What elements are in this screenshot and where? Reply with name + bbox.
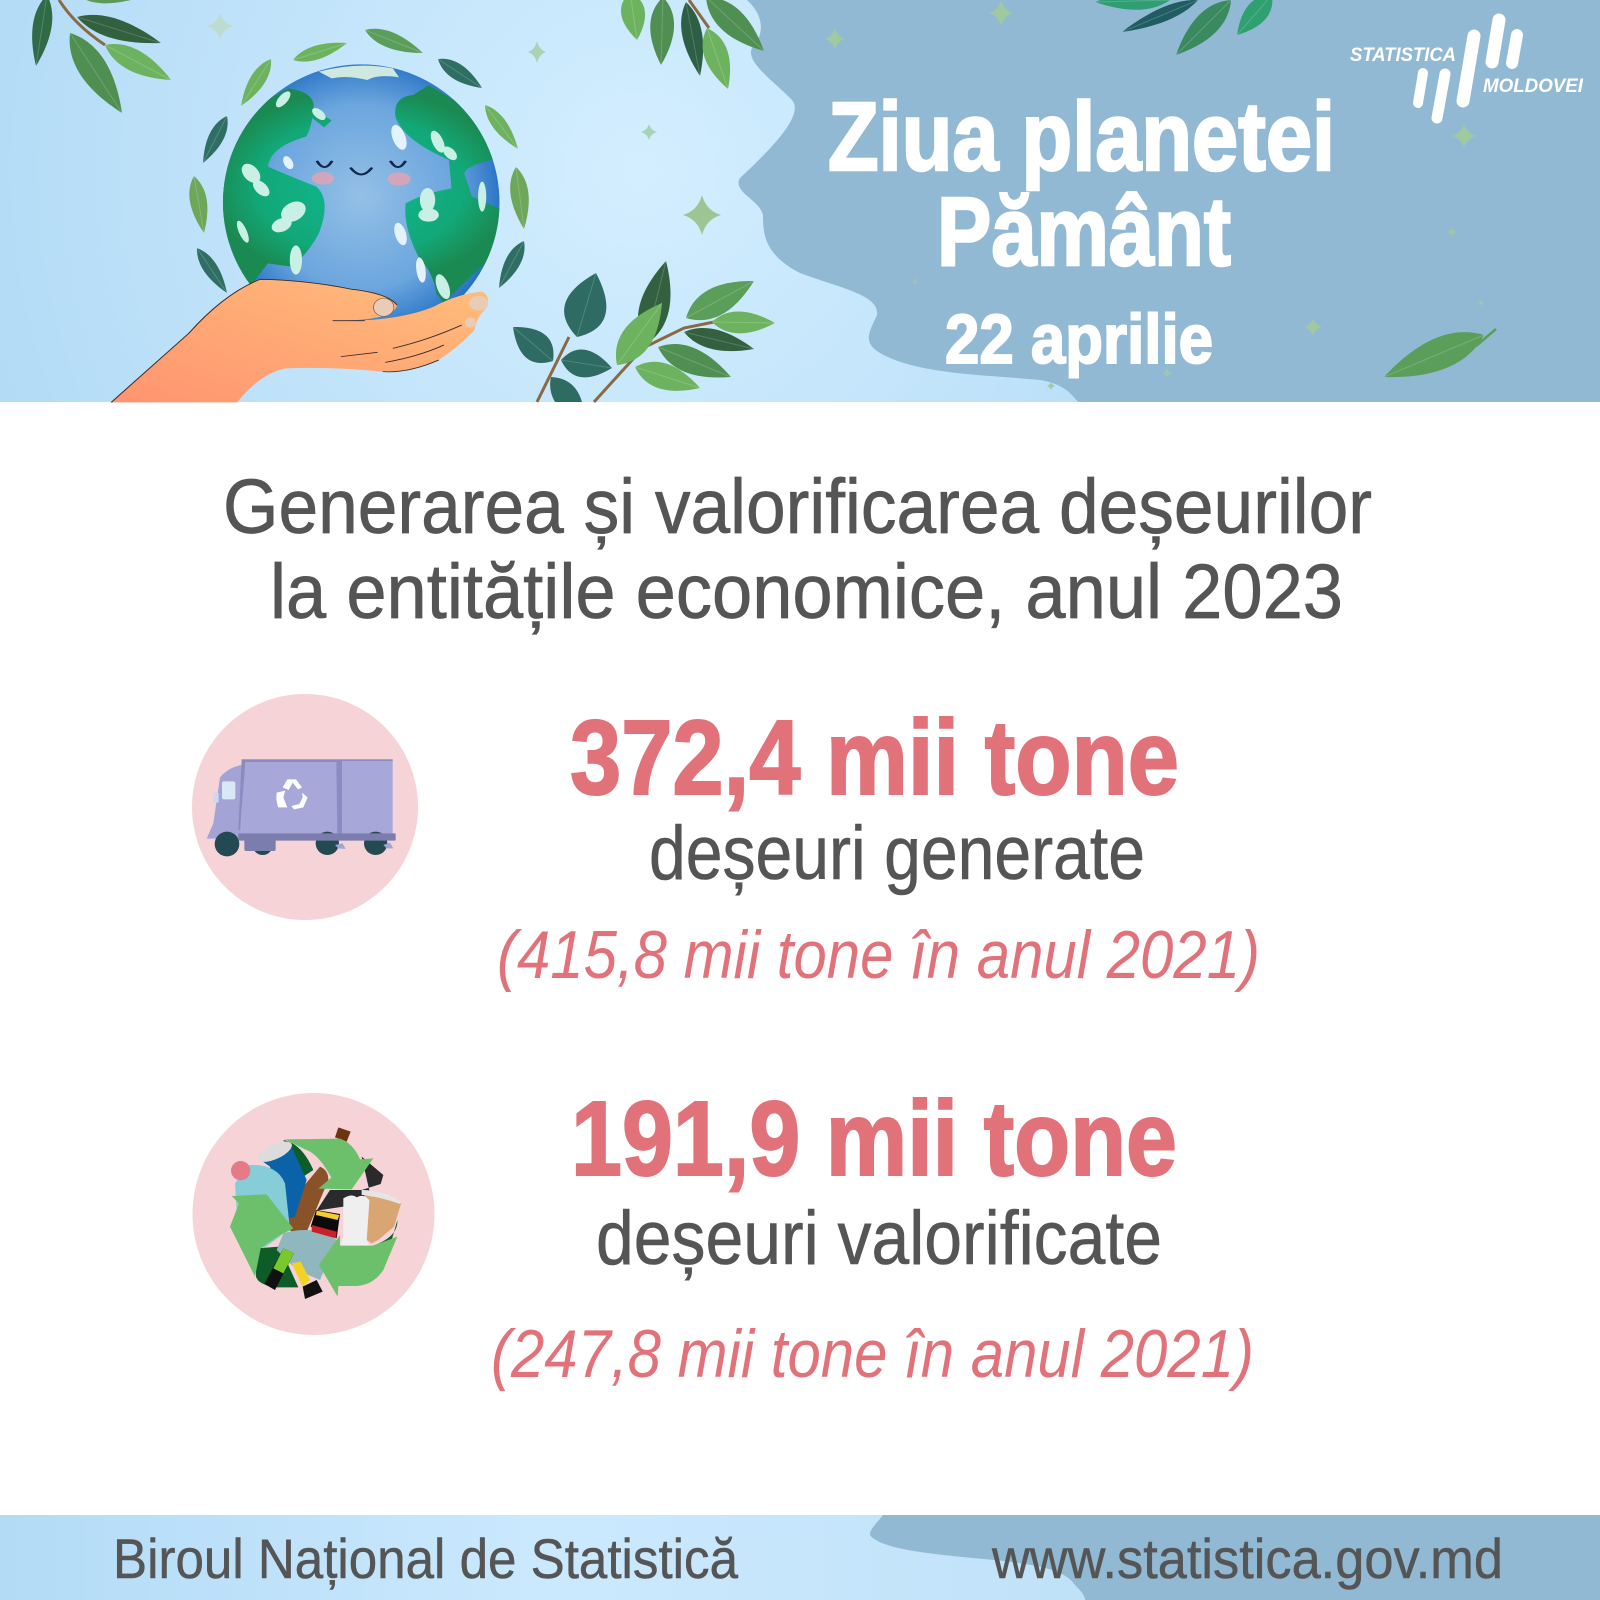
stat: waste recovered: 191,9 mii tone	[571, 1080, 1177, 1198]
leaf: bottom right	[1378, 320, 1496, 392]
clouds	[234, 90, 486, 300]
cheeks	[312, 172, 411, 186]
leaves: top centre branch	[618, 0, 773, 93]
sparkles	[207, 0, 1484, 390]
banner title: Ziua planetei	[828, 82, 1335, 191]
stat: waste generated: 372,4 mii tone	[570, 699, 1179, 817]
leaves: ring around the globe	[186, 23, 533, 297]
panel: header banner	[0, 0, 1600, 402]
hand outline and finger lines	[111, 279, 462, 402]
ocean clouds	[281, 124, 427, 283]
logo bars	[1418, 20, 1517, 118]
polar ice cap	[319, 66, 399, 80]
heading: Generarea și valorificarea deșeurilor	[223, 464, 1372, 550]
recycling arrows	[230, 1139, 397, 1297]
heading: la entitățile economice, anul 2023	[270, 549, 1343, 635]
fingernails	[373, 298, 394, 316]
heading	[223, 464, 1372, 635]
stat: waste recovered	[491, 1080, 1254, 1392]
globe face	[317, 162, 405, 174]
black bag	[317, 1157, 383, 1211]
blue can	[258, 1143, 307, 1220]
dark arrow shadows	[256, 1140, 397, 1287]
logo: Statistica Moldovei	[1350, 20, 1584, 118]
stat: waste recovered: deșeuri valorificate	[596, 1196, 1162, 1281]
panel: footer band	[0, 1515, 1600, 1600]
banner date: 22 aprilie	[945, 300, 1213, 378]
leaves: top right	[1095, 0, 1280, 63]
plastic bottle	[235, 1165, 289, 1248]
globe continents	[204, 85, 510, 303]
paper cup	[362, 1192, 402, 1243]
wave panel: title background	[739, 0, 1600, 402]
leaves: top left branch	[27, 0, 176, 121]
stat: waste generated: deșeuri generate	[649, 811, 1145, 896]
icon: garbage truck in pink circle	[192, 694, 418, 920]
light bulb	[340, 1196, 370, 1246]
banner title: Pământ	[937, 177, 1231, 286]
stat: waste generated	[497, 699, 1260, 993]
stat: waste generated: (415,8 mii tone în anul 2021)	[497, 917, 1260, 993]
logo: Statistica Moldovei: MOLDOVEI	[1483, 76, 1584, 97]
footer website: www.statistica.gov.md	[991, 1527, 1503, 1590]
footer wave	[870, 1515, 1600, 1600]
battery	[311, 1210, 340, 1238]
banner title	[828, 82, 1335, 378]
recycling symbol	[276, 779, 308, 809]
hand	[111, 279, 488, 402]
leaves: bottom branch	[503, 257, 775, 402]
sky background	[0, 0, 1600, 402]
illustration: smiling globe	[111, 64, 510, 402]
logo wordmark: STATISTICA	[1350, 45, 1456, 66]
stat: waste recovered: (247,8 mii tone în anul 2021)	[491, 1316, 1254, 1392]
footer source: Biroul Național de Statistică	[113, 1527, 739, 1590]
small batteries	[264, 1248, 294, 1290]
brown bottle	[335, 1127, 351, 1142]
icon: recycling with mixed waste in pink circle	[192, 1093, 434, 1335]
